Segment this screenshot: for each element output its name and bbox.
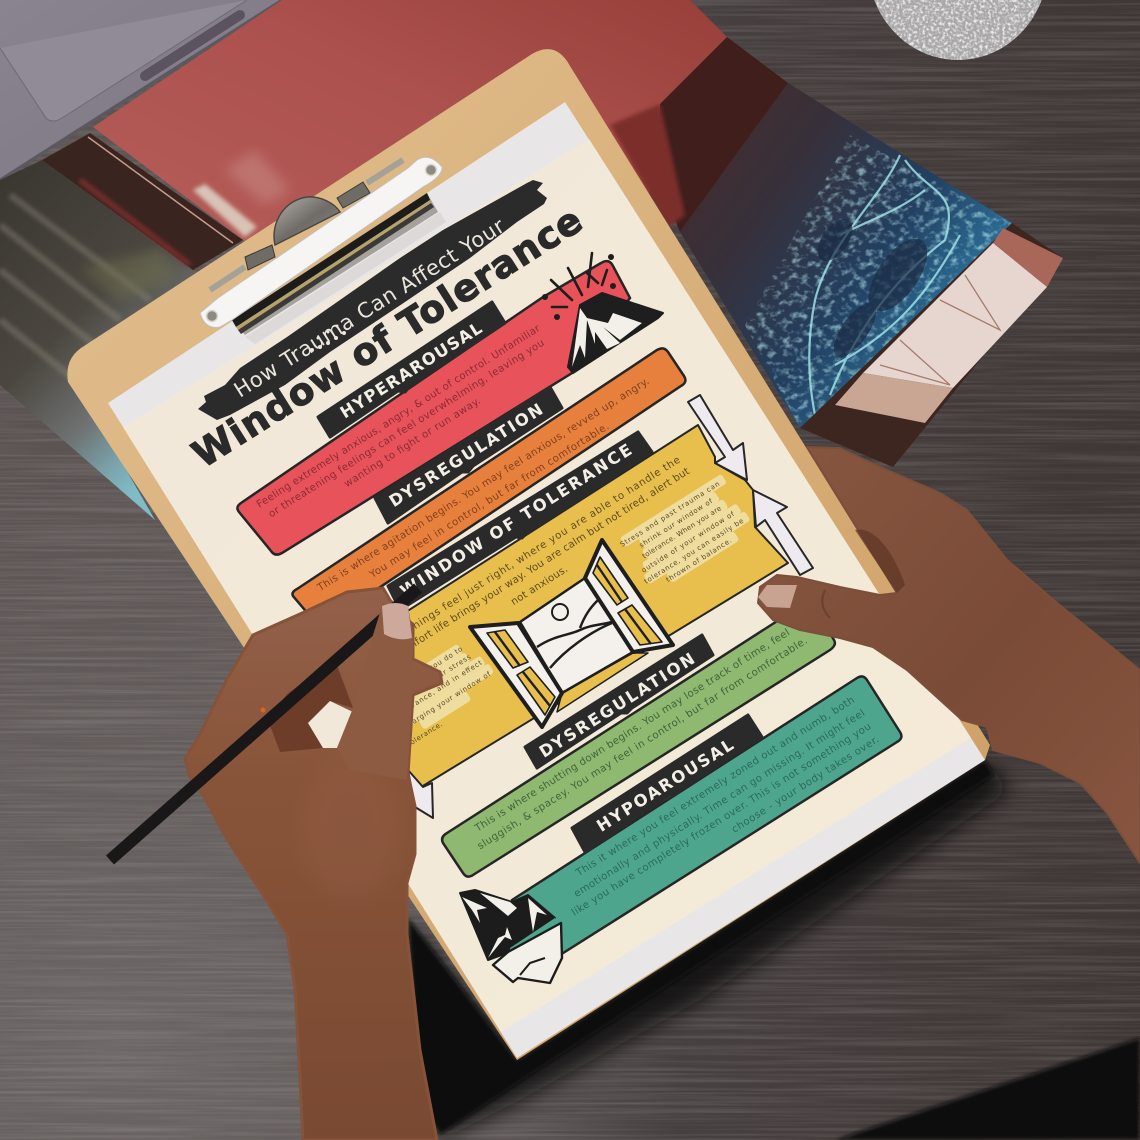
note: shrink window: thrown of balance.	[665, 537, 733, 584]
label: dysregulation lower: DYSREGULATION	[536, 649, 698, 761]
right hand holding clipboard	[758, 447, 1140, 863]
hypoarousal description: choose - your body takes over.	[730, 734, 881, 835]
hypoarousal description: like you have completely frozen over. This is not something you	[570, 721, 873, 919]
note: enlarge window: tolerance.	[406, 720, 444, 748]
pencil	[110, 588, 418, 860]
panel: dysregulation lower	[442, 600, 835, 877]
icon: volcano mountain with sparks	[542, 253, 663, 373]
note: shrink window: tolerance. When you are	[641, 504, 723, 560]
label: dysregulation upper: DYSREGULATION	[386, 400, 546, 511]
thumb nail	[382, 603, 412, 639]
clipboard board	[67, 49, 990, 1060]
note: shrink window: outside of your window of	[640, 510, 736, 575]
lower dysregulation description: This is where shutting down begins. You may lose track of time, feel	[473, 627, 792, 835]
hypoarousal description: emotionally and physically. Time can go missing. It might feel	[572, 708, 867, 900]
hyperarousal description: Feeling extremely anxious, angry, & out of control. Unfamiliar	[255, 323, 543, 511]
icon: open window	[470, 540, 673, 727]
lower dysregulation description: sluggish, & spacey. You may feel in control, but far from comfortable.	[476, 636, 810, 852]
title: main heading: Window of Tolerance	[185, 198, 590, 476]
label: window of tolerance: WINDOW OF TOLERANCE	[397, 440, 635, 601]
label: hypoarousal: HYPOAROUSAL	[593, 735, 737, 836]
note: shrink window: shrink our window of	[638, 497, 714, 549]
magazine: blue marble page	[680, 83, 1015, 430]
note: enlarge window: enlarging your window of	[400, 670, 492, 732]
note: enlarge window: tolerance, and in effect	[396, 659, 484, 718]
laptop corner	[0, 0, 282, 180]
glass on desk	[868, 0, 1048, 60]
window of tolerance description: not anxious.	[509, 564, 570, 608]
hyperarousal description: or threatening feelings can feel overwhelming, leaving you	[267, 338, 547, 520]
magazine: dark stripes page	[0, 133, 243, 520]
label: hyperarousal	[318, 302, 505, 437]
arrow: lower left	[408, 770, 433, 818]
note: enlarge window: Anything you do to	[394, 645, 464, 694]
panel: hypoarousal	[512, 676, 901, 955]
paper sheet	[108, 102, 985, 1058]
hyperarousal description: wanting to fight or run away.	[343, 396, 483, 490]
note: shrink window: tolerance, you can easily be	[643, 517, 745, 586]
hypoarousal description: This it where you feel extremely zoned out and numb, both	[574, 695, 857, 879]
panel: window of tolerance	[331, 425, 788, 792]
panel: dysregulation upper	[292, 348, 685, 626]
arrow: narrowing from top	[688, 395, 747, 480]
shadow under clipboard	[408, 760, 1010, 1140]
arrow: narrowing from bottom	[753, 490, 813, 575]
magazine: cream page	[800, 223, 1063, 467]
thumb	[337, 603, 413, 780]
window of tolerance description: Here things feel just right, where you are able to handle the	[381, 455, 683, 651]
title: subtitle line: How Trauma Can Affect Your	[230, 214, 509, 402]
magazine: red page	[93, 0, 788, 300]
left hand holding pencil	[110, 588, 442, 1140]
note: enlarge window	[371, 635, 500, 748]
note: enlarge window: increase your stress	[395, 653, 473, 706]
icon: inverted mountain	[460, 890, 562, 983]
title brush background	[198, 180, 547, 420]
upper dysregulation description: You may feel in control, but far from comfortable.	[367, 421, 611, 581]
note: shrink window: Stress and past trauma can	[619, 480, 721, 549]
panel: hyperarousal	[237, 261, 630, 555]
note: shrink window	[619, 474, 756, 594]
upper dysregulation description: This is where agitation begins. You may feel anxious, revved up, angry.	[315, 376, 651, 594]
window of tolerance description: discomfort life brings your way. You are calm but not tired, alert but	[382, 466, 692, 668]
label: hypoarousal	[572, 715, 762, 852]
clipboard metal clip	[200, 157, 446, 344]
label: hyperarousal: HYPERAROUSAL	[337, 318, 486, 422]
